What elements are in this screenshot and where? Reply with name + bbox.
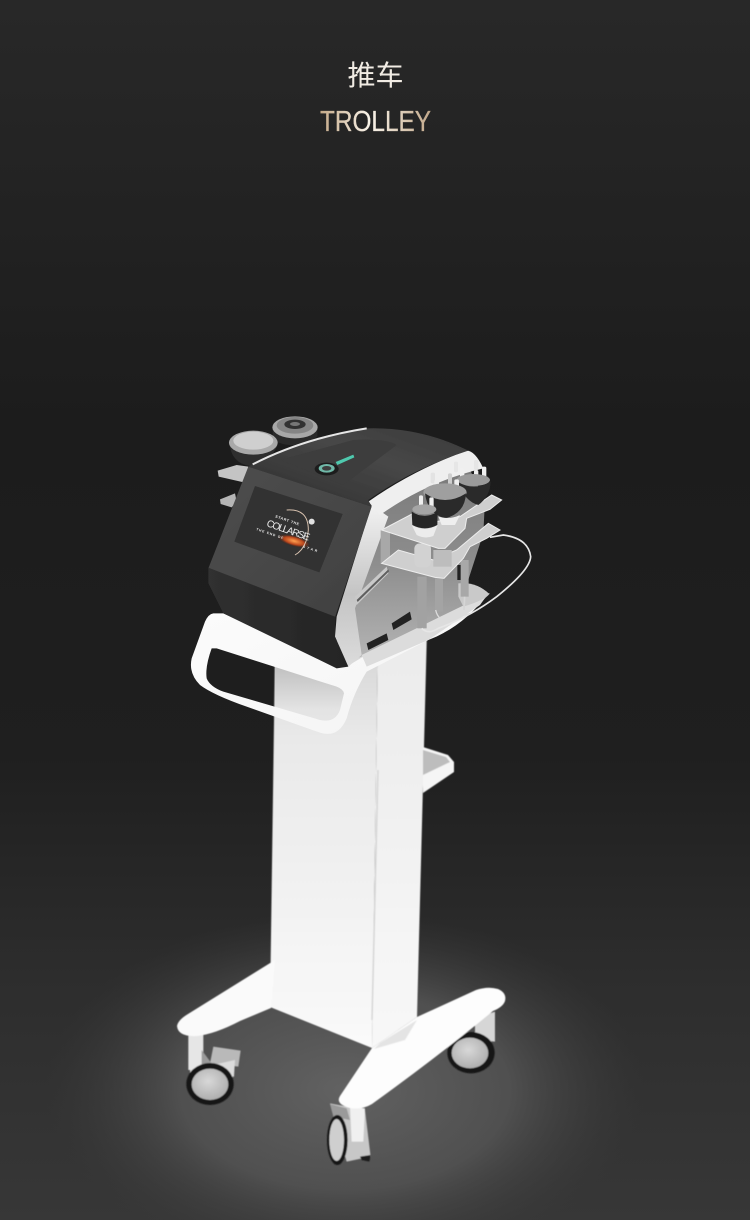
upper shelf plate <box>382 495 502 548</box>
wheel: rear left <box>186 1035 241 1105</box>
flat round handpiece <box>229 431 278 466</box>
screen text: START THE <box>275 514 300 527</box>
small side shelf on column <box>423 747 454 793</box>
back handpiece <box>454 460 491 505</box>
top recessed panel <box>280 440 397 485</box>
middle handpiece <box>423 473 467 525</box>
heading: English title: TROLLEY <box>320 106 431 138</box>
front panel <box>208 467 372 617</box>
top cover <box>248 428 468 507</box>
side panel: vents <box>367 612 412 650</box>
screen text: THE END OF <box>256 527 284 540</box>
screen text: COLLARSE <box>265 518 311 544</box>
screen text: STAR <box>302 544 318 553</box>
handpiece rack <box>381 460 531 632</box>
column seen through handle opening <box>275 623 345 710</box>
side panel <box>335 470 490 667</box>
heading: Chinese title: 推车 <box>347 60 404 91</box>
lower stems <box>417 560 469 628</box>
rear round handpiece <box>272 416 318 445</box>
machine group <box>191 416 531 734</box>
lower shelf plate <box>382 523 500 578</box>
thin rim highlight <box>253 428 367 464</box>
cable <box>422 535 531 632</box>
white top band <box>368 451 483 515</box>
screen <box>234 486 343 572</box>
bracket back plate <box>381 525 390 564</box>
cable branch <box>436 610 470 620</box>
back holder plates <box>218 465 248 507</box>
side panel: interior <box>350 470 490 658</box>
base: joint shadow <box>374 1020 417 1049</box>
base disc under rack <box>458 583 489 607</box>
base: left arm <box>177 960 275 1036</box>
screen: eclipse graphic <box>276 510 315 555</box>
indicator light <box>336 455 354 465</box>
dark block behind stems <box>457 565 462 580</box>
white tray with handle <box>191 590 488 734</box>
front handpiece <box>412 495 438 537</box>
wheel: front <box>327 1103 371 1165</box>
screen text <box>256 514 318 553</box>
side panel: wires <box>355 567 389 605</box>
base: right arm <box>339 988 505 1108</box>
side panel: silver strip <box>335 505 388 667</box>
wheel: rear right <box>447 1012 495 1073</box>
middle stems <box>414 543 452 567</box>
column: main pillar <box>270 630 427 1048</box>
power knob <box>315 463 339 475</box>
side panel: lower tray lip <box>362 593 488 667</box>
trolley stand and wheels <box>177 630 505 1165</box>
lower dark panel <box>208 568 348 668</box>
